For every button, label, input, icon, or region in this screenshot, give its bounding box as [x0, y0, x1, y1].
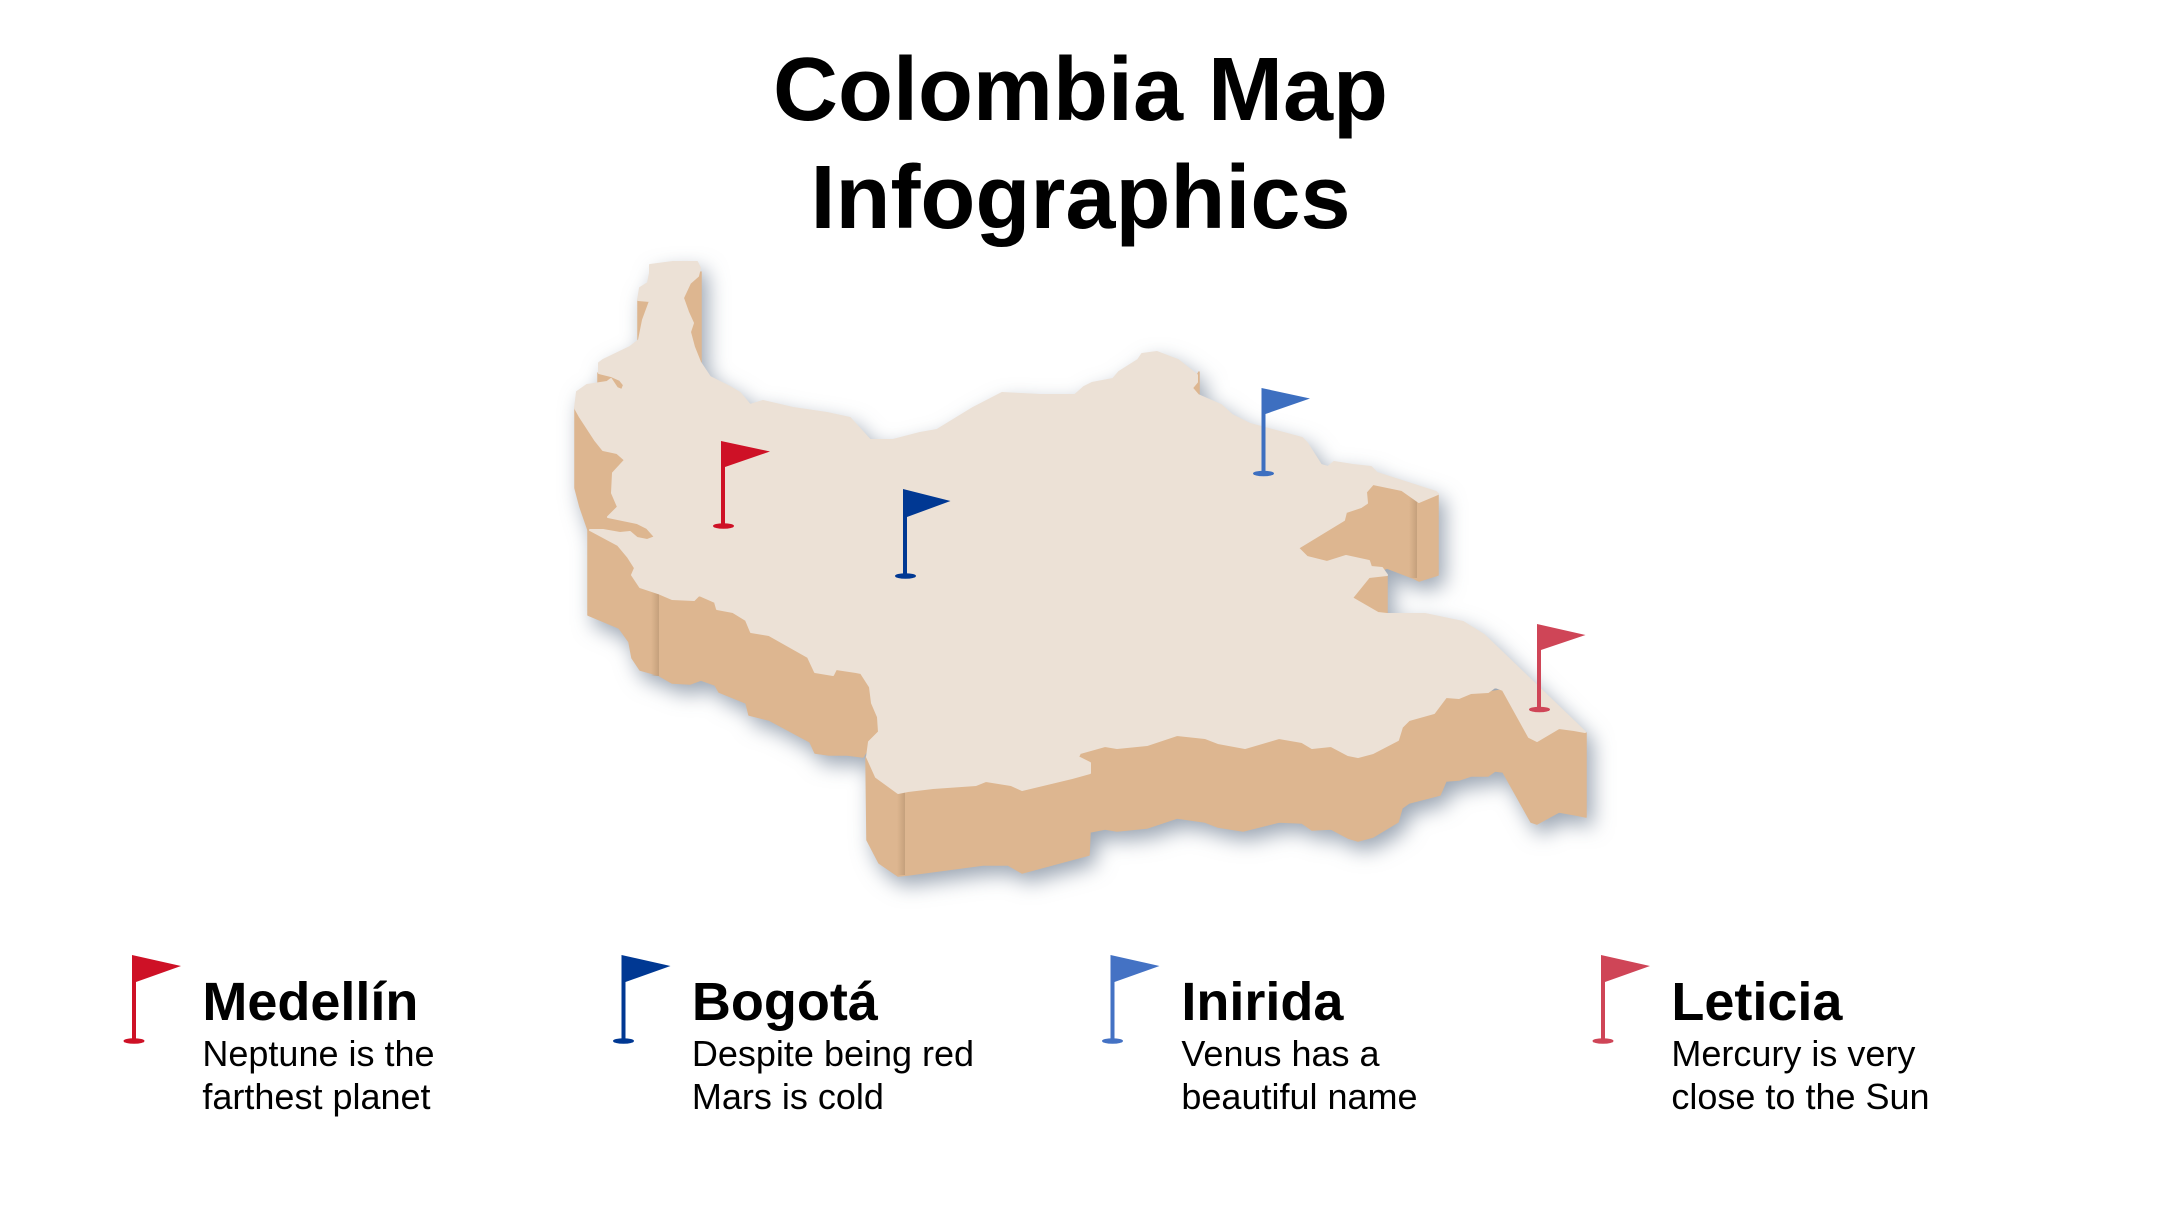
legend item: Inirida: [1102, 955, 1418, 1117]
title: [773, 40, 1388, 248]
map flag: Leticia: [1529, 624, 1586, 712]
legend item: Leticia: [1592, 955, 1930, 1117]
description: Inirida: beautiful name: [1181, 1076, 1418, 1117]
description: Bogotá: Mars is cold: [692, 1076, 884, 1117]
description: Leticia: Mercury is very: [1671, 1033, 1915, 1074]
description: Medellín: farthest planet: [202, 1076, 431, 1117]
title: Colombia Map: [773, 40, 1388, 140]
legend item: Bogotá: [613, 955, 974, 1117]
heading: Leticia: Leticia: [1671, 972, 1843, 1032]
map extruded sides: [575, 272, 1586, 876]
map flag: Inirida: [1253, 388, 1310, 476]
map top surface: [575, 262, 1585, 793]
heading: Inirida: Inirida: [1181, 972, 1344, 1032]
side face shading: [651, 494, 1417, 875]
title: Infographics: [810, 148, 1351, 248]
icon: blue flag: [1102, 955, 1160, 1044]
icon: navy flag: [613, 955, 670, 1044]
heading: Bogotá: Bogotá: [692, 972, 879, 1032]
map flag: Medellín: [713, 441, 770, 529]
heading: Medellín: Medellín: [202, 972, 418, 1032]
3D map of Colombia: [575, 262, 1586, 876]
description: Inirida: Venus has a: [1181, 1033, 1381, 1074]
description: Bogotá: Despite being red: [692, 1033, 974, 1074]
description: Medellín: Neptune is the: [202, 1033, 435, 1074]
map flag: Bogotá: [895, 489, 950, 579]
legend item: Medellín: [124, 955, 435, 1117]
icon: pink flag: [1592, 955, 1650, 1044]
description: Leticia: close to the Sun: [1671, 1076, 1930, 1117]
icon: red flag: [124, 955, 181, 1044]
